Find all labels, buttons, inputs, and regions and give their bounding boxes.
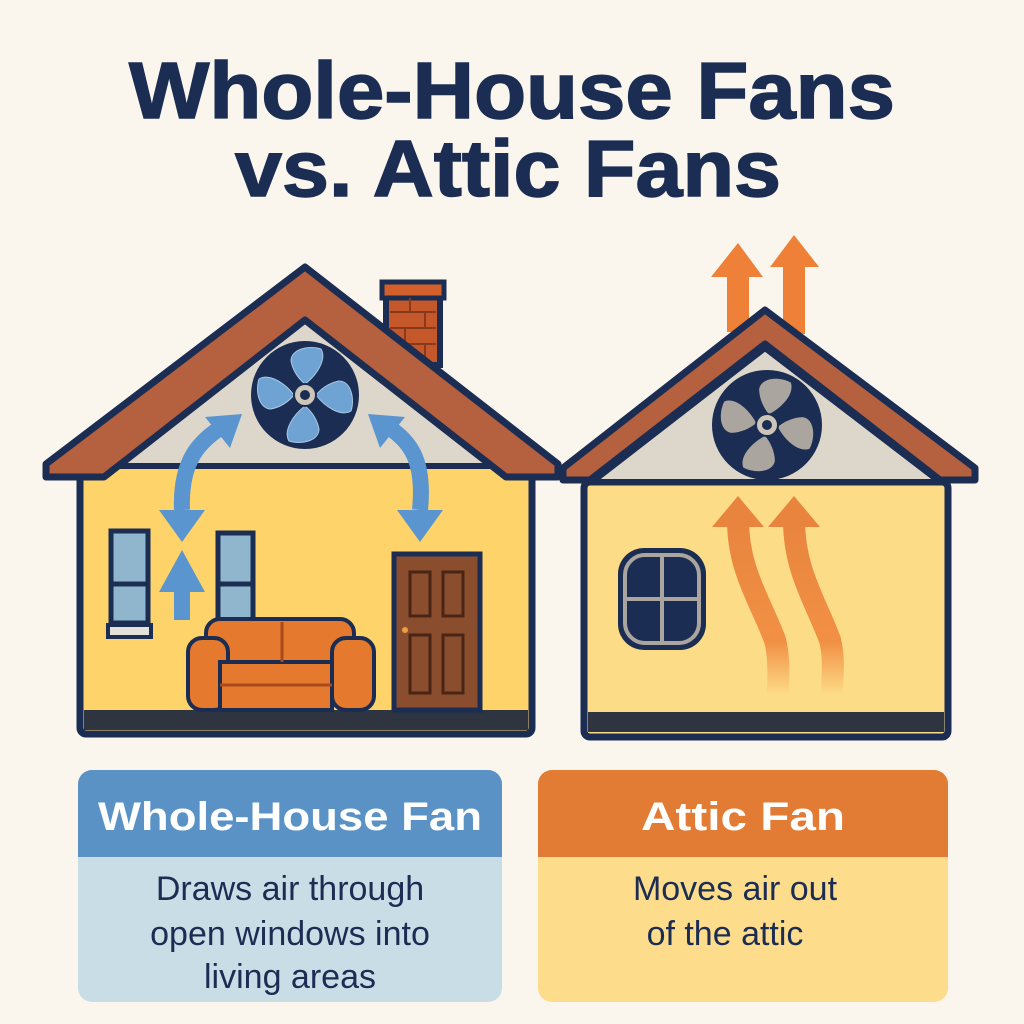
panel: attic fan xyxy=(538,770,948,1002)
door xyxy=(394,554,480,710)
text block: Draws air through xyxy=(156,870,424,908)
house: attic fan xyxy=(563,235,975,737)
text block: Moves air out xyxy=(633,870,838,908)
title: Whole-House Fans xyxy=(129,46,895,135)
text block xyxy=(633,870,838,953)
roof xyxy=(46,267,558,477)
text block: living areas xyxy=(204,958,376,996)
title: vs. Attic Fans xyxy=(235,124,781,213)
arrows: rising hot air xyxy=(712,496,833,695)
arrows: airflow blue xyxy=(182,425,421,620)
windows xyxy=(108,531,151,637)
text block: open windows into xyxy=(150,915,430,953)
text block xyxy=(150,870,430,996)
sofa xyxy=(188,619,374,710)
heading: Attic Fan xyxy=(641,795,845,839)
heading: Whole-House Fan xyxy=(98,795,482,839)
walls xyxy=(584,482,948,737)
gable xyxy=(104,305,506,466)
walls xyxy=(80,462,532,734)
panel: whole-house fan xyxy=(78,770,502,1002)
house: whole-house fan xyxy=(46,267,558,734)
window round xyxy=(618,548,706,650)
title xyxy=(129,46,895,213)
arrows: hot air out xyxy=(711,235,819,334)
fan xyxy=(712,370,822,480)
fan xyxy=(251,341,359,449)
chimney xyxy=(382,282,444,365)
roof xyxy=(563,310,975,480)
text block: of the attic xyxy=(647,915,803,953)
gable xyxy=(592,348,940,482)
